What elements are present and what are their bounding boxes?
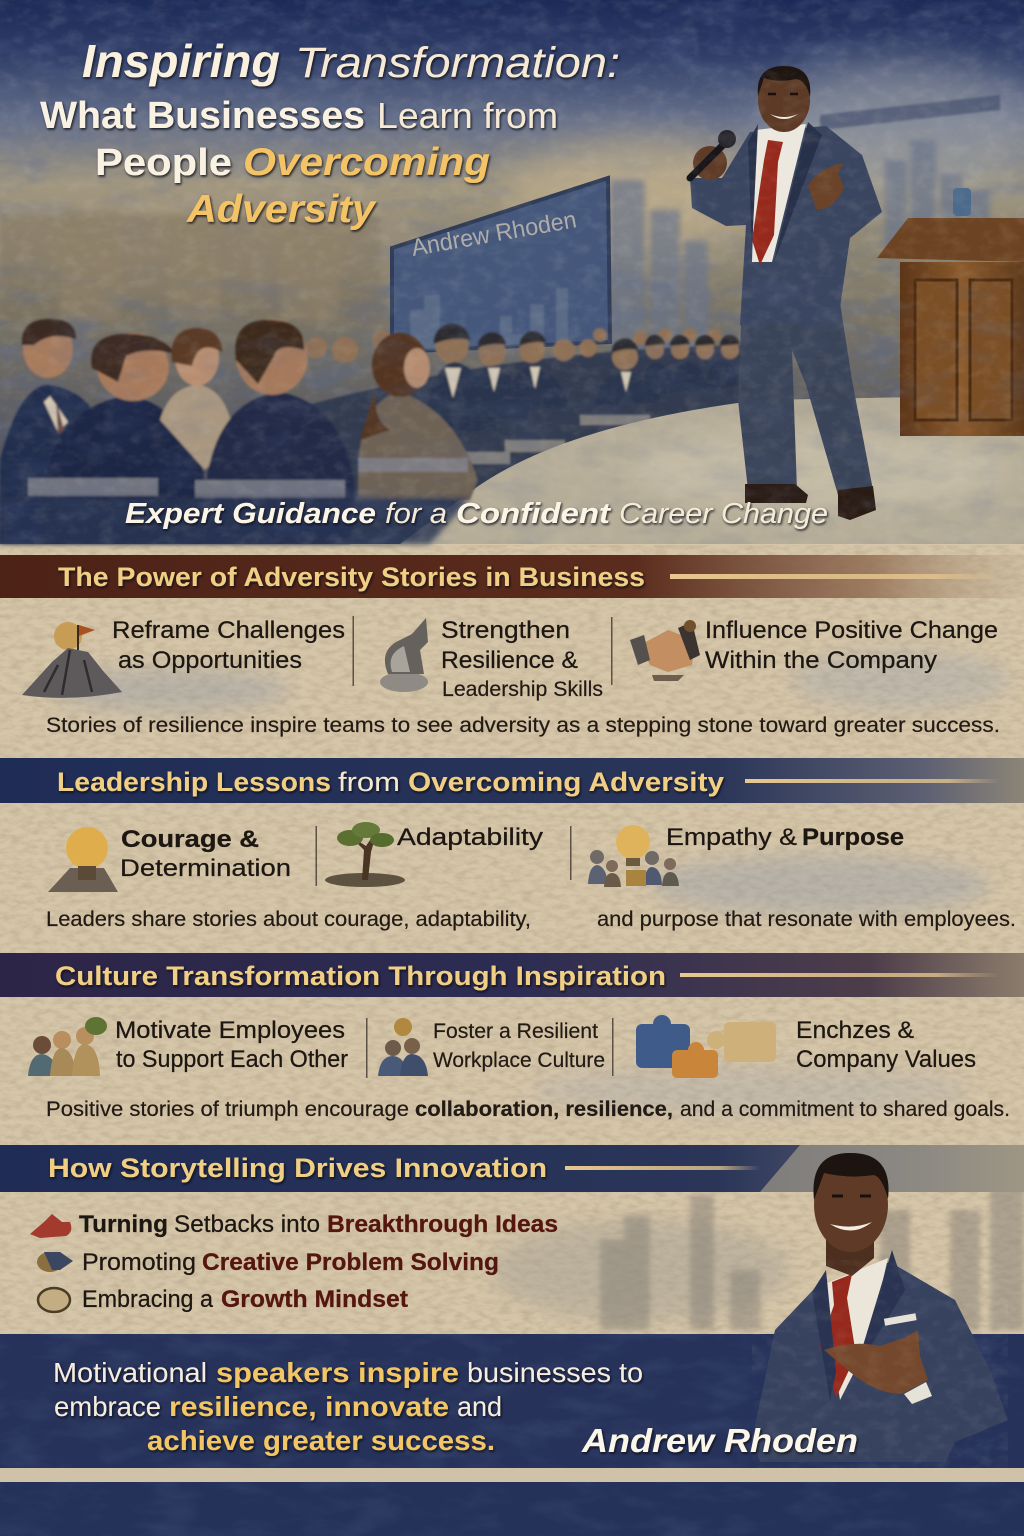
item: foster resilient culture	[433, 1020, 605, 1072]
item: adaptability: Adaptability	[397, 824, 543, 851]
summary text	[46, 908, 1016, 931]
icon: compass badge	[37, 1252, 73, 1272]
item: strengthen resilience: Leadership Skills	[442, 678, 603, 701]
icon: tree	[325, 822, 405, 887]
panel: the power of adversity stories	[0, 555, 1024, 737]
item: courage and determination	[120, 826, 291, 882]
section heading band: Leadership Lessons	[57, 767, 331, 797]
item: reframe challenges: Reframe Challenges	[112, 617, 345, 644]
front row of audience	[0, 319, 478, 544]
icon: employees supporting each other	[28, 1017, 107, 1076]
hero title: People	[95, 142, 232, 184]
summary text: and purpose that resonate with employees.	[597, 908, 1016, 931]
closing message: achieve greater success.	[147, 1425, 495, 1456]
panel: storytelling drives innovation	[0, 1145, 1024, 1330]
gesturing hand	[808, 163, 844, 209]
section heading band	[0, 758, 1024, 803]
section heading band: How Storytelling Drives Innovation	[48, 1153, 547, 1183]
city skyline	[610, 140, 990, 360]
icon: bulb with team	[588, 825, 679, 887]
summary text: Stories of resilience inspire teams to see adversity as a stepping stone toward greater success.	[46, 714, 1000, 737]
item: reframe challenges: as Opportunities	[118, 647, 302, 674]
speaker name: Andrew Rhoden	[581, 1422, 858, 1459]
icon: resilient team	[378, 1018, 428, 1076]
hero backdrop	[0, 0, 1024, 544]
icon: chess knight	[380, 618, 428, 692]
hero title: What Businesses	[40, 95, 365, 137]
summary text: Positive stories of triumph encourage	[46, 1098, 409, 1121]
item: foster resilient culture: Foster a Resilient	[433, 1020, 598, 1043]
section heading band: Culture Transformation Through Inspiration	[55, 961, 666, 991]
faded city backdrop	[600, 1160, 1024, 1330]
item: reframe challenges	[112, 617, 345, 674]
bullet: creative problem solving: Promoting	[82, 1249, 196, 1276]
hero tagline: Career Change	[619, 498, 828, 530]
presentation screen with speaker name: Andrew Rhoden	[409, 206, 579, 262]
item: foster resilient culture: Workplace Culture	[433, 1049, 605, 1072]
icon: light bulb on rock	[48, 827, 118, 892]
closing message: Motivational	[53, 1357, 207, 1388]
bullet: turning setbacks: Setbacks into	[174, 1211, 320, 1238]
hero title: Learn from	[377, 95, 558, 136]
bullet: creative problem solving: Creative Problem Solving	[202, 1249, 499, 1276]
icon: puzzle pieces	[636, 1015, 776, 1078]
section heading band: Overcoming Adversity	[408, 767, 724, 797]
icon: growth badge	[38, 1288, 70, 1312]
section heading band: from	[338, 767, 400, 797]
summary text: collaboration, resilience,	[415, 1098, 673, 1121]
item: motivate employees: to Support Each Other	[116, 1046, 348, 1073]
section heading band	[0, 555, 1024, 598]
closing message: speakers inspire	[216, 1357, 459, 1388]
hero title: Overcoming	[243, 141, 490, 184]
hero title: Transformation:	[295, 39, 620, 87]
presentation screen with speaker name	[392, 178, 610, 352]
item: company values: Company Values	[796, 1046, 976, 1073]
hero illustration: keynote speaker on stage	[0, 0, 1024, 544]
panel: leadership lessons	[0, 758, 1024, 931]
icon: mountain with flag	[22, 622, 122, 698]
summary text	[46, 1098, 1010, 1121]
bullet: turning setbacks: Turning	[79, 1211, 168, 1238]
section heading band: The Power of Adversity Stories in Business	[58, 562, 645, 592]
speaker in blue suit with microphone	[690, 66, 882, 520]
closing message: resilience, innovate	[169, 1391, 449, 1422]
hero title: Adversity	[186, 188, 377, 231]
hero tagline: Expert Guidance	[125, 498, 376, 530]
closing message	[53, 1357, 643, 1456]
back rows of audience	[290, 324, 770, 500]
item: empathy and purpose: Empathy &	[666, 824, 797, 851]
item: strengthen resilience: Resilience &	[441, 647, 578, 674]
bullet: turning setbacks: Breakthrough Ideas	[327, 1211, 558, 1238]
head	[758, 68, 810, 132]
closing message: and	[457, 1391, 502, 1422]
hero title	[40, 35, 620, 231]
closing banner	[0, 1334, 1024, 1536]
section heading band	[0, 1145, 1024, 1192]
jacket	[690, 126, 882, 325]
hero tagline: Confident	[456, 498, 612, 530]
trousers and shoes	[738, 290, 873, 495]
item: company values	[796, 1017, 976, 1073]
icon: red fish sketch	[30, 1214, 71, 1238]
item: strengthen resilience	[441, 617, 603, 701]
item: company values: Enchzes &	[796, 1017, 914, 1044]
lectern	[877, 188, 1024, 436]
item: courage and determination: Determination	[120, 855, 291, 882]
summary text: Leaders share stories about courage, adaptability,	[46, 908, 531, 931]
bullet: creative problem solving	[82, 1249, 499, 1276]
summary text: and a commitment to shared goals.	[680, 1098, 1010, 1121]
item: motivate employees	[115, 1017, 348, 1073]
item: empathy and purpose: Purpose	[802, 824, 904, 851]
bullet: growth mindset: Embracing a	[82, 1286, 214, 1313]
item: empathy and purpose	[666, 824, 904, 851]
bullet: growth mindset	[82, 1286, 408, 1313]
hero tagline: for a	[385, 498, 447, 530]
section heading band	[0, 953, 1024, 997]
bullet: growth mindset: Growth Mindset	[221, 1286, 408, 1313]
hero tagline	[125, 498, 828, 530]
closing message: embrace	[54, 1391, 161, 1422]
bullet: turning setbacks	[79, 1211, 558, 1238]
stage floor	[400, 395, 1024, 544]
item: strengthen resilience: Strengthen	[441, 617, 570, 644]
icon: handshake	[630, 620, 700, 681]
item: influence positive change: Within the Company	[705, 647, 937, 674]
item: influence positive change	[705, 617, 998, 674]
portrait: Andrew Rhoden	[752, 1153, 1008, 1470]
panel: culture transformation	[0, 953, 1024, 1121]
item: influence positive change: Influence Positive Change	[705, 617, 998, 644]
hero title: Inspiring	[82, 35, 280, 87]
closing message: businesses to	[467, 1357, 643, 1388]
item: courage and determination: Courage &	[121, 826, 259, 853]
item: motivate employees: Motivate Employees	[115, 1017, 345, 1044]
raised hand and microphone	[693, 146, 727, 180]
painterly mottling	[0, 0, 1024, 544]
